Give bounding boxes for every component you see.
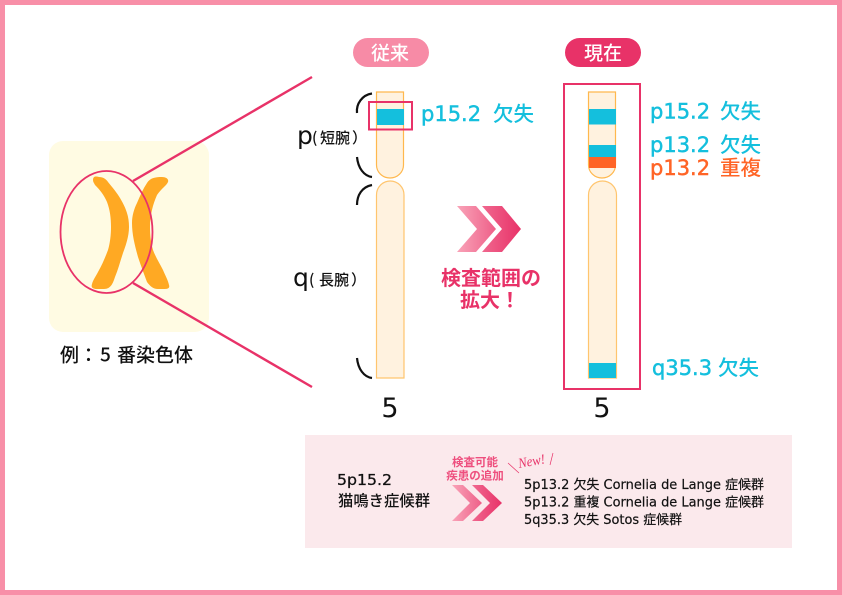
icon: left chromatid (92, 176, 129, 289)
list: newly detectable syndromes: 5q35.3 欠失 Sotos 症候群 (524, 512, 682, 528)
caption: example chromosome 5: 例： (60, 340, 98, 368)
text: previous syndrome (337, 471, 430, 511)
label pill: current: 現在 (584, 38, 622, 66)
list: newly detectable syndromes: 5p13.2 重複 Cornelia de Lange 症候群 (524, 494, 764, 510)
label: q long arm (293, 263, 366, 292)
label: q long arm: q (293, 263, 309, 292)
label: q long arm: ） (351, 269, 366, 290)
bracket: q arm (357, 185, 372, 378)
text: expanded scope (441, 262, 541, 313)
label: p13.2 duplication: p13.2 (650, 156, 710, 180)
label: p13.2 deletion: p13.2 (650, 133, 710, 157)
label: chromosome number previous: 5 (381, 393, 399, 424)
band: p15.2 (377, 109, 404, 125)
icon: right chromatid (132, 177, 169, 289)
label: p short arm: p (297, 121, 313, 150)
badge: new: New! (516, 452, 547, 472)
label: p15.2 deletion: p15.2 (650, 100, 710, 124)
text: expanded scope: 検査範囲の (441, 262, 541, 291)
highlight box: p15.2 (369, 102, 412, 130)
label: p15.2 deletion previous: 欠失 (493, 97, 534, 127)
band: p13.2 deletion (589, 145, 616, 157)
text: added diseases: 疾患の追加 (446, 468, 504, 484)
arrow: added diseases (452, 485, 502, 521)
label: q35.3 deletion: q35.3 (652, 356, 712, 380)
panel: whole cell example (49, 141, 209, 332)
text: previous syndrome: 5p15.2 (337, 471, 392, 489)
list: newly detectable syndromes (524, 477, 764, 528)
p arm (376, 92, 404, 178)
chromosome: current (588, 92, 616, 378)
label: p13.2 duplication: 重複 (720, 151, 761, 181)
arrow: expansion (457, 206, 521, 252)
label: p15.2 deletion: 欠失 (720, 94, 761, 124)
label pill: current (565, 38, 641, 67)
label: p15.2 deletion previous: p15.2 (421, 102, 481, 126)
label: p13.2 deletion: 欠失 (720, 128, 761, 158)
band: p15.2 (589, 109, 616, 124)
label pill: previous: 従来 (371, 38, 409, 66)
zoom ellipse (60, 171, 152, 293)
label: p short arm (297, 121, 367, 150)
text: added diseases: 検査可能 (452, 454, 498, 470)
label: p short arm: ( (312, 127, 317, 148)
label: q long arm: ( (309, 269, 314, 290)
chromosome: previous (376, 92, 404, 378)
highlight box: whole chromosome (564, 84, 640, 389)
label: q long arm: 長腕 (319, 269, 349, 290)
bracket: p arm (357, 94, 372, 177)
list: newly detectable syndromes: 5p13.2 欠失 Cornelia de Lange 症候群 (524, 477, 764, 493)
zoom line: upper (133, 77, 312, 181)
badge: new (508, 452, 553, 473)
label: q35.3 deletion: 欠失 (718, 351, 759, 381)
caption: example chromosome 5: 番染色体 (117, 340, 193, 368)
text: expanded scope: 拡大！ (460, 284, 520, 313)
caption: example chromosome 5: 5 (100, 340, 111, 368)
zoom line: lower (133, 283, 312, 387)
text: previous syndrome: 猫鳴き症候群 (338, 489, 430, 511)
band: q35.3 (589, 363, 616, 378)
q arm (588, 181, 616, 378)
label: p short arm: ） (352, 127, 367, 148)
label: chromosome number current: 5 (593, 393, 611, 424)
label pill: previous (353, 38, 429, 67)
band: p13.2 duplication (589, 157, 616, 168)
p arm (588, 92, 616, 178)
q arm (376, 181, 404, 378)
label: p short arm: 短腕 (320, 127, 350, 148)
panel: detectable diseases (305, 435, 792, 548)
text: added diseases (446, 454, 504, 484)
